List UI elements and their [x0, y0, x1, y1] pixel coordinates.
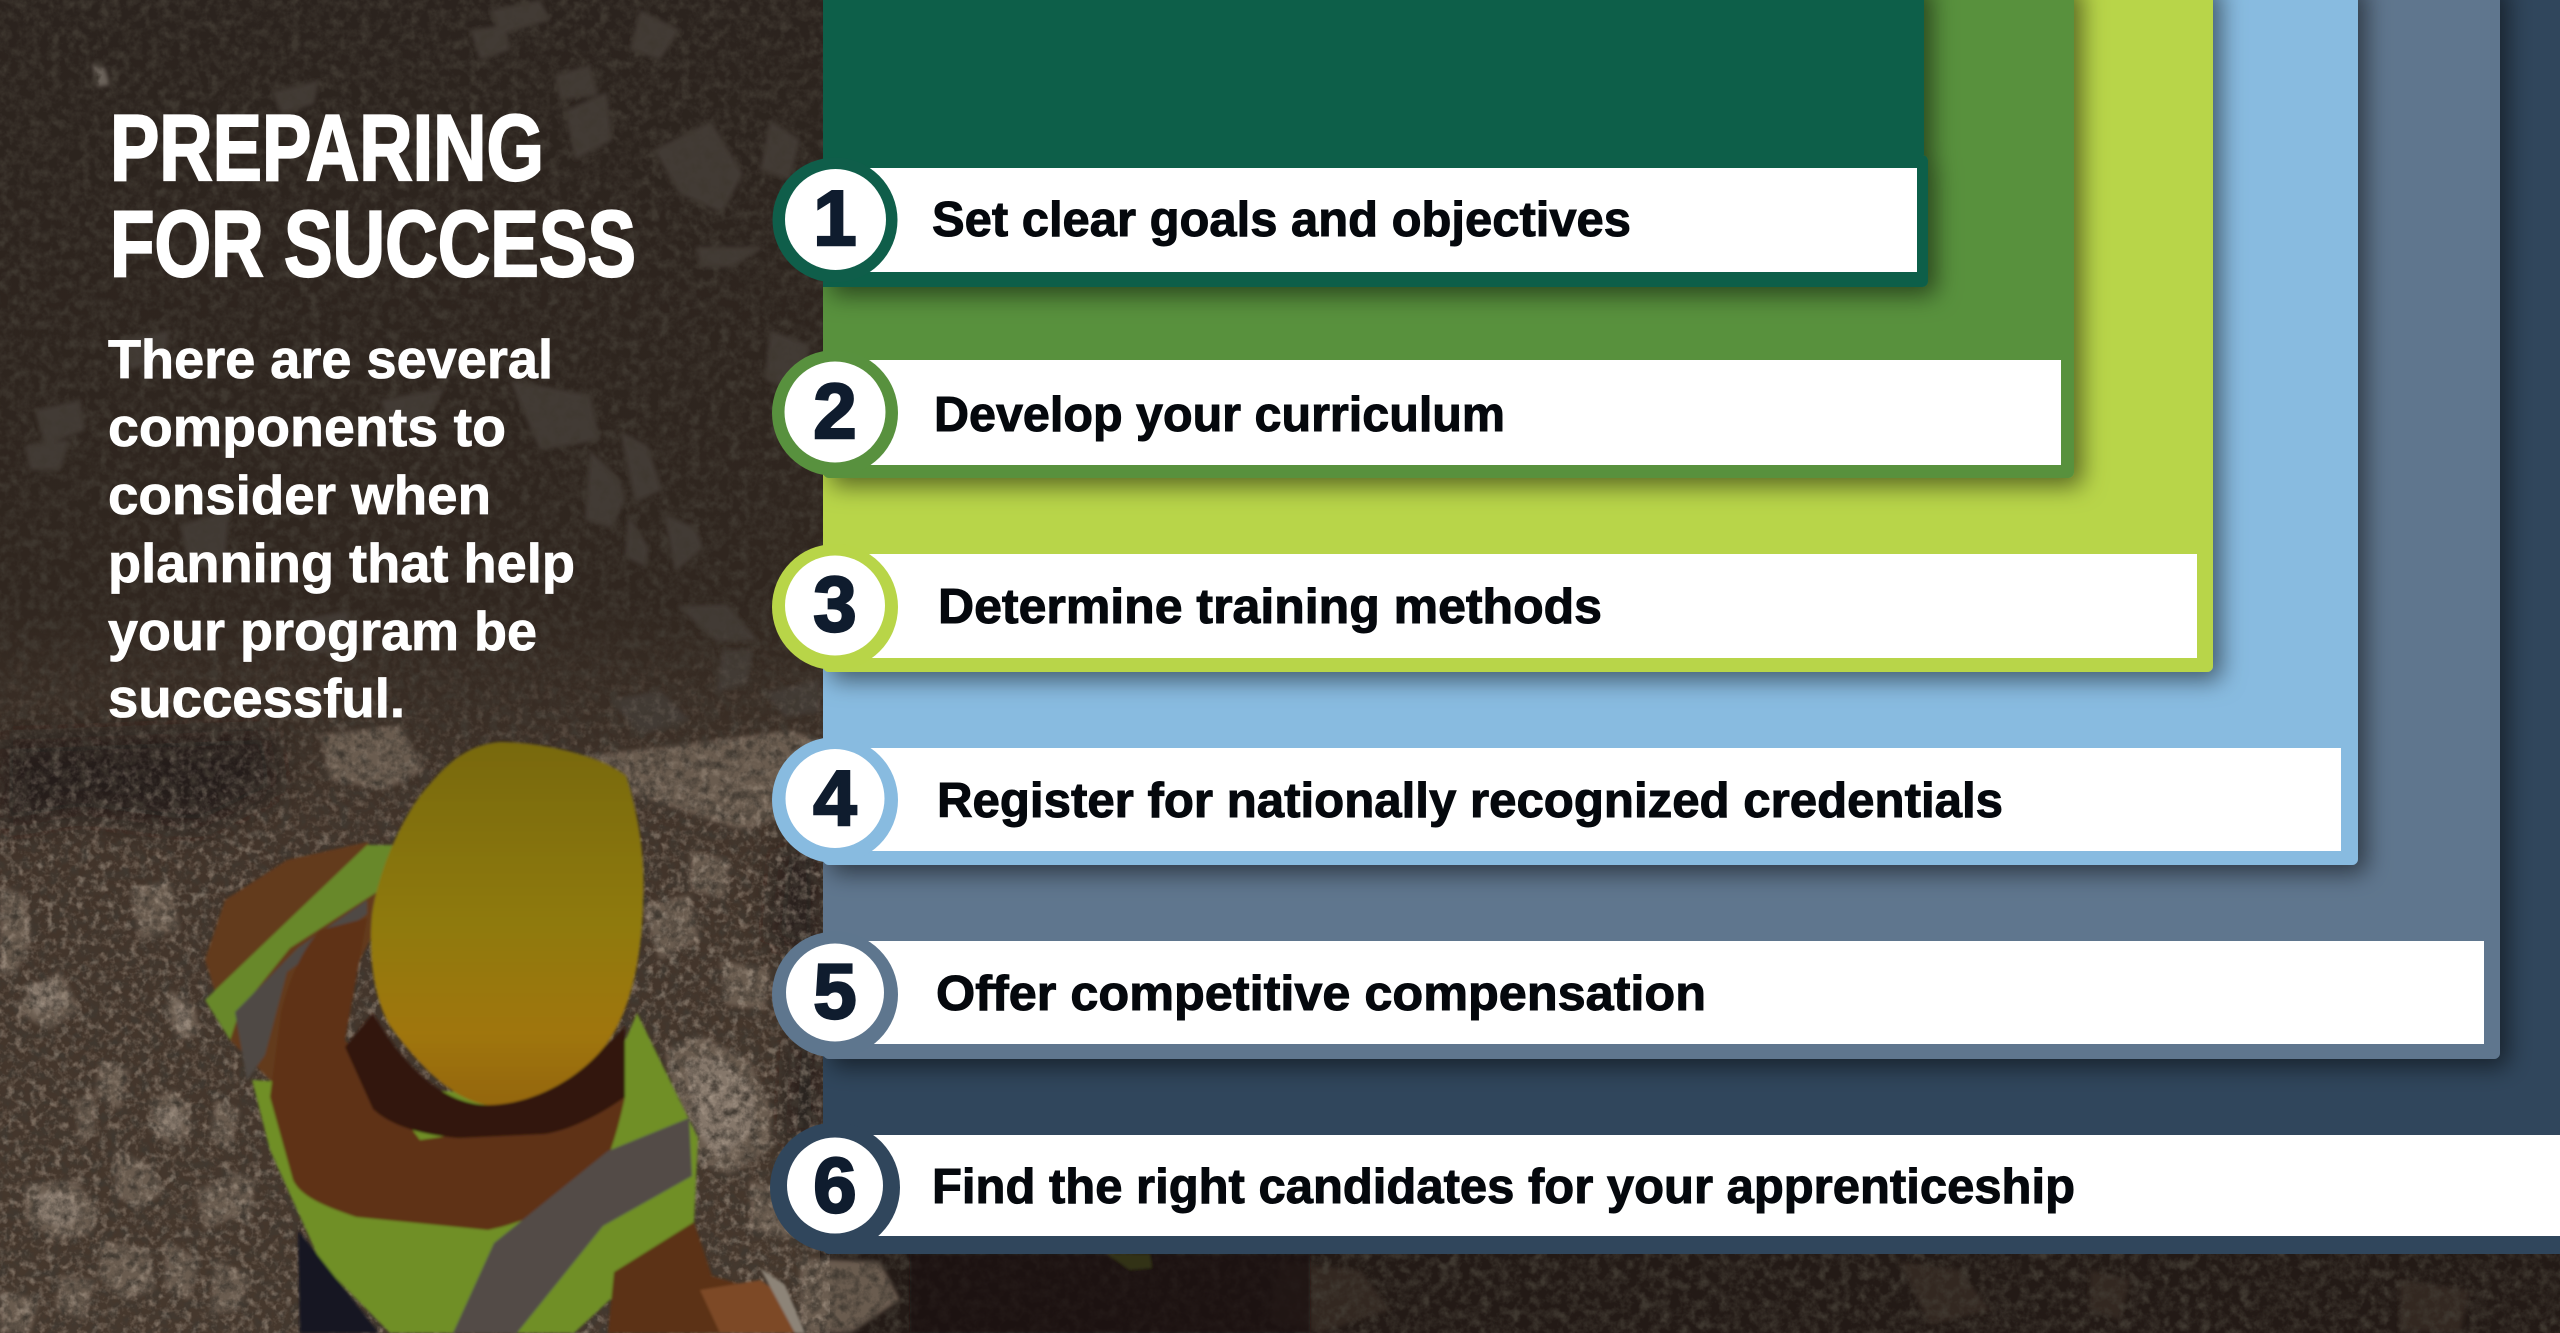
photo: construction worker from above [205, 742, 1310, 1333]
panel 5: slate [823, 0, 2500, 1059]
title [110, 95, 636, 296]
step 6: 6 [813, 1141, 857, 1229]
step 4 [772, 737, 2341, 863]
panel 2: green [823, 0, 2074, 478]
step 6: Find the right candidates for your apprenticeship [932, 1160, 2075, 1214]
step 3: 3 [813, 560, 857, 648]
step 1 [772, 158, 1917, 282]
step 3: Determine training methods [938, 580, 1602, 634]
panel 4: light blue [823, 0, 2358, 865]
intro text: There are several [108, 328, 553, 390]
step 3 [772, 544, 2197, 670]
step 4: Register for nationally recognized credentials [937, 774, 2003, 828]
title: FOR SUCCESS [110, 191, 636, 296]
intro text [108, 328, 575, 729]
step 2 [772, 350, 2061, 476]
step 5: 5 [813, 947, 857, 1035]
step 2: Develop your curriculum [934, 388, 1505, 442]
intro text: components to [108, 396, 506, 458]
panel 3: lime [823, 0, 2213, 672]
panel 1: dark green [823, 0, 1928, 287]
intro text: planning that help [108, 532, 575, 594]
step 1: Set clear goals and objectives [932, 193, 1631, 247]
step 5 [772, 932, 2484, 1058]
step 6 [770, 1122, 2560, 1252]
step 2: 2 [813, 367, 857, 455]
stacked step panels [823, 0, 2560, 1254]
intro text: your program be [108, 600, 537, 662]
intro text: successful. [108, 667, 405, 729]
step 4: 4 [813, 754, 857, 842]
title: PREPARING [110, 95, 544, 200]
step 5: Offer competitive compensation [936, 967, 1706, 1021]
intro text: consider when [108, 464, 491, 526]
panel 6: navy [823, 0, 2560, 1254]
step 1: 1 [813, 174, 857, 262]
